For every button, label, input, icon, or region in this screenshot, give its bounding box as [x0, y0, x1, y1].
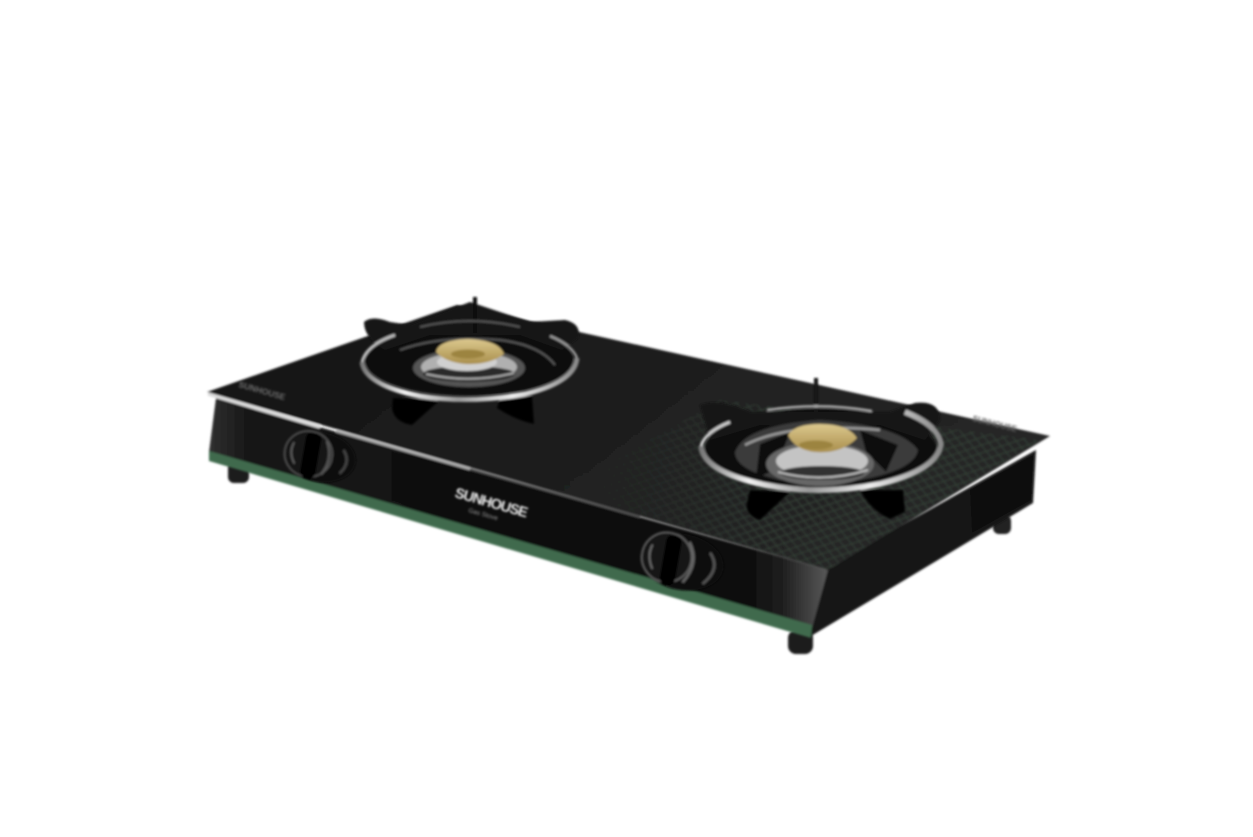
glass top — [207, 305, 1050, 570]
front logo: SUNHOUSE — [453, 485, 530, 522]
burner right — [700, 378, 941, 520]
product illustration: gas stove — [206, 295, 1051, 656]
recess — [365, 325, 573, 395]
knob right — [636, 527, 728, 597]
recess — [705, 409, 937, 491]
inner arms — [756, 432, 790, 478]
front logo: Gas Stove — [467, 507, 499, 522]
feet — [228, 462, 1011, 654]
side panel — [808, 450, 1036, 636]
front pan supports — [392, 398, 440, 425]
green glass edge — [209, 451, 812, 638]
back pan supports — [700, 403, 940, 440]
chrome ring — [362, 358, 577, 400]
burner cap — [413, 349, 525, 387]
left brand mark on glass: SUNHOUSE — [237, 379, 287, 402]
burner cap — [766, 442, 874, 486]
back pan supports — [364, 302, 579, 350]
stove body — [207, 305, 1050, 638]
front glass highlight — [208, 394, 320, 427]
burner left — [362, 297, 579, 425]
drip plate — [735, 420, 918, 480]
chrome ring — [701, 412, 941, 490]
right brand mark on glass: SUNHOUSE — [972, 414, 1018, 434]
front panel — [209, 398, 828, 628]
glass pattern — [682, 402, 1036, 568]
knob left — [280, 426, 360, 488]
front pan supports — [747, 490, 790, 520]
